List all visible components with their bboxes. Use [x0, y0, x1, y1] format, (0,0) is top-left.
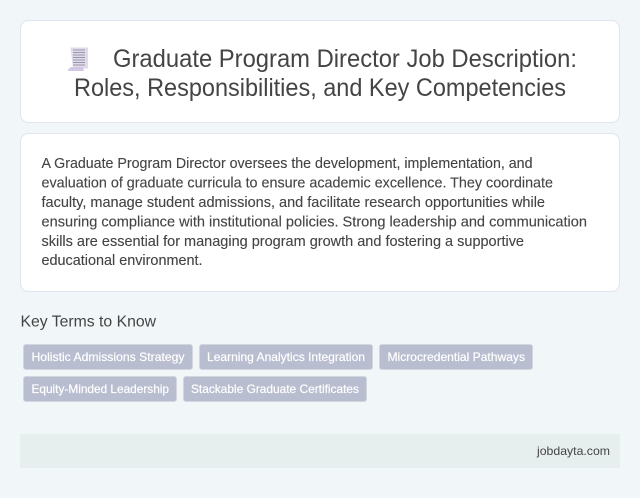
description text	[42, 156, 587, 269]
description text: faculty, manage student admissions, and facilitate research opportunities while	[42, 195, 545, 211]
chip: Equity-Minded Leadership: Equity-Minded Leadership	[32, 382, 169, 396]
footer bar	[20, 434, 620, 468]
icon: document scroll	[68, 48, 88, 71]
description text: ensuring compliance with institutional policies. Strong leadership and communication	[42, 214, 587, 230]
title	[74, 45, 577, 102]
description text: A Graduate Program Director oversees the development, implementation, and	[42, 156, 532, 172]
panel: title card	[20, 20, 620, 122]
chip: Equity-Minded Leadership	[24, 376, 176, 402]
title: Roles, Responsibilities, and Key Competencies	[74, 74, 566, 102]
chip: Stackable Graduate Certificates: Stackable Graduate Certificates	[191, 382, 359, 396]
term chips	[24, 344, 532, 402]
heading: key terms: Key Terms to Know	[20, 314, 156, 330]
description text: evaluation of graduate curricula to ensure academic excellence. They coordinate	[42, 176, 553, 192]
description text: skills are essential for managing program growth and fostering a supportive	[42, 234, 524, 250]
chip: Microcredential Pathways: Microcredential Pathways	[388, 350, 525, 364]
footer site name: jobdayta.com	[536, 444, 610, 458]
chip: Holistic Admissions Strategy: Holistic Admissions Strategy	[32, 350, 184, 364]
panel: description card	[20, 134, 620, 292]
chip: Holistic Admissions Strategy	[24, 344, 192, 370]
chip: Microcredential Pathways	[380, 344, 532, 370]
chip: Learning Analytics Integration	[200, 344, 372, 370]
description text: educational environment.	[42, 253, 202, 269]
chip: Learning Analytics Integration: Learning Analytics Integration	[207, 350, 365, 364]
title: Graduate Program Director Job Description:	[113, 45, 577, 73]
chip: Stackable Graduate Certificates	[184, 376, 366, 402]
